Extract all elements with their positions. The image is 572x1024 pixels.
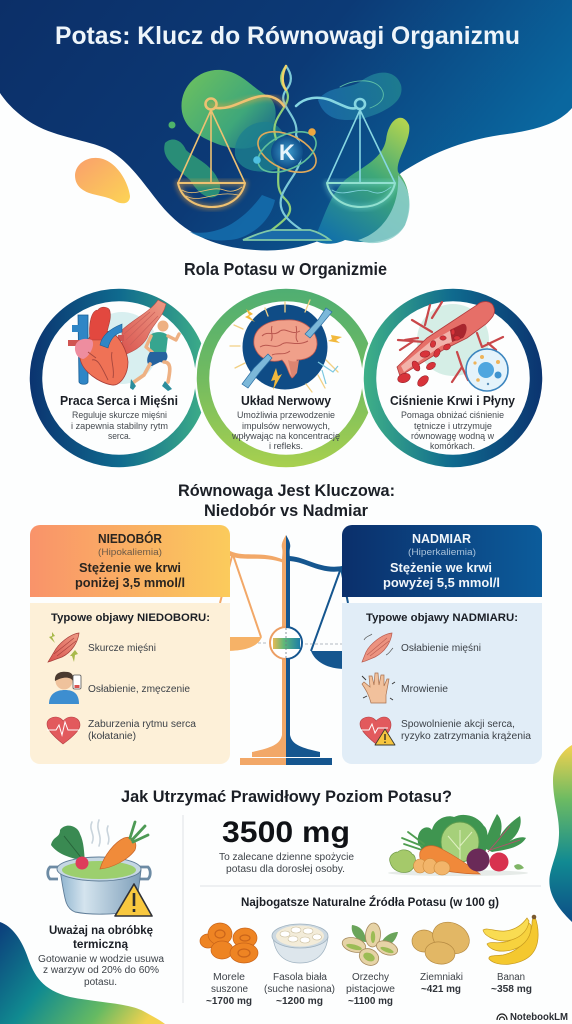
left scale beam and pan (178, 96, 284, 207)
carrot slices (414, 859, 426, 873)
label: Ciśnienie Krwi: Pomaga obniżać ciśnienie (401, 410, 504, 421)
panel: excess symptoms: Spowolnienie akcji serca, (401, 719, 515, 730)
beam (230, 551, 284, 563)
food: potatoes (412, 916, 475, 995)
text block: cooking warning: Uważaj na obróbkę (49, 923, 153, 937)
heading: Rola Potasu: Rola Potasu w Organizmie (184, 259, 387, 279)
icon: brain and nerve impulses (230, 300, 342, 392)
text block: cooking warning: Gotowanie w wodzie usuwa (38, 954, 164, 965)
food: dried apricots (200, 923, 258, 1007)
atom with K symbol: K (279, 140, 295, 165)
label: Praca Serca: Praca Serca i Mięśni (60, 394, 178, 408)
panel: excess header (342, 525, 542, 597)
atom with K symbol (252, 123, 322, 181)
food: white beans: ~1200 mg (276, 996, 323, 1007)
stat: daily intake (219, 816, 354, 875)
pulmonary artery (100, 324, 122, 348)
label: Praca Serca: serca. (108, 431, 131, 442)
gauge (270, 627, 302, 659)
atrium (75, 339, 93, 359)
title: Potas: Klucz do Równowagi Organizmu (55, 22, 520, 50)
food: potatoes: ~421 mg (421, 984, 461, 995)
panel: deficiency header: (Hipokaliemia) (98, 547, 162, 558)
panel: deficiency symptoms: Osłabienie, zmęczenie (88, 684, 190, 695)
icon: heart, muscle and runner (68, 300, 179, 391)
heading: Jak Utrzymać: Jak Utrzymać Prawidłowy Poziom Potasu? (121, 787, 452, 806)
food: white beans: (suche nasiona) (264, 984, 335, 995)
icon: weak muscle (362, 633, 393, 662)
heading: Równowaga: Równowaga Jest Kluczowa: (178, 482, 395, 500)
central balance scale (220, 535, 350, 765)
panel: excess symptoms: Typowe objawy NADMIARU: (366, 612, 518, 624)
pole (252, 535, 286, 757)
label: Ciśnienie Krwi: Ciśnienie Krwi i Płyny (390, 394, 515, 408)
leaves back (418, 815, 488, 860)
panel: excess header: (Hiperkaliemia) (408, 547, 476, 558)
beet leaves (51, 826, 85, 862)
steam (91, 820, 109, 846)
food: bananas (483, 915, 538, 995)
label: Ciśnienie Krwi: tętnicze i utrzymuje (414, 421, 492, 432)
food: dried apricots: Morele (213, 972, 245, 983)
panel: excess symptoms: ryzyko zatrzymania krążenia (401, 731, 531, 742)
panel: excess symptoms (342, 603, 542, 764)
red blood cells (396, 329, 460, 388)
heading: sources: Najbogatsze Naturalne Źródła Potasu (w 100 g) (241, 896, 499, 909)
food: potatoes: Ziemniaki (420, 972, 463, 983)
panel: deficiency header (30, 525, 230, 597)
panel: deficiency header: poniżej 3,5 mmol/l (75, 575, 185, 590)
logo: NotebookLM: NotebookLM (510, 1012, 568, 1023)
label: Układ Nerwowy: Układ Nerwowy (241, 394, 331, 408)
pot handles (48, 867, 150, 879)
text block: cooking warning (38, 923, 164, 988)
label: Ciśnienie Krwi: równowagę wodną w (411, 431, 494, 442)
label: Praca Serca (60, 394, 178, 442)
food: dried apricots: suszone (211, 984, 248, 995)
label: Ciśnienie Krwi (390, 394, 515, 452)
text block: cooking warning: z warzyw od 20% do 60% (43, 965, 159, 976)
food: bananas: ~358 mg (491, 984, 532, 995)
panel: deficiency header: NIEDOBÓR (98, 531, 162, 546)
carrot (420, 846, 480, 874)
decorative orange blob (75, 158, 130, 203)
heart (80, 331, 128, 385)
label: Praca Serca: i zapewnia stabilny rytm (71, 421, 168, 432)
heading: Równowaga (178, 482, 395, 520)
muscle (122, 300, 166, 356)
icon: tingling hand (362, 673, 395, 703)
scale pole (twisted) (243, 66, 330, 240)
warning triangle (115, 884, 152, 916)
header wave background (0, 0, 572, 250)
panel: deficiency symptoms (30, 603, 230, 764)
stat: daily intake: To zalecane dzienne spożycie (219, 852, 354, 863)
food: pistachios: Orzechy (352, 972, 389, 983)
dashed level (258, 643, 342, 644)
food: white beans: Fasola biała (273, 972, 327, 983)
food: white beans (264, 924, 335, 1007)
icon: tired person (49, 672, 81, 704)
label: Układ Nerwowy: Umożliwia przewodzenie (237, 410, 335, 421)
carrot (100, 837, 136, 869)
base (240, 758, 286, 765)
radish (76, 856, 88, 870)
vessel (78, 315, 88, 384)
stat: daily intake: potasu dla dorosłej osoby. (226, 864, 345, 875)
panel: deficiency symptoms: Typowe objawy NIEDOBORU: (51, 612, 210, 624)
text block: cooking warning: potasu. (84, 977, 117, 988)
food: pistachios (341, 922, 400, 1007)
panel: excess symptoms: Osłabienie mięśni (401, 643, 481, 654)
icon: cramping muscle (48, 632, 79, 662)
decorative bottom-left blob (0, 922, 165, 1024)
icon: blood vessel and cell (396, 302, 508, 391)
runner (158, 320, 168, 332)
vessel lumen (401, 324, 467, 372)
panel: excess symptoms: Mrowienie (401, 684, 448, 695)
strings and pans (220, 555, 261, 637)
text block: cooking warning: termiczną (73, 937, 128, 951)
beet and radish (466, 848, 490, 872)
right scale beam and pan (296, 81, 395, 207)
icon: vegetables (388, 814, 528, 876)
panel: deficiency symptoms: Zaburzenia rytmu serca (88, 719, 196, 730)
food: bananas: Banan (497, 972, 525, 983)
label: Układ Nerwowy: i refleks. (269, 441, 303, 452)
carrot tops (402, 832, 424, 850)
panel: excess header: NADMIAR (412, 532, 471, 546)
cell (466, 349, 508, 391)
panel: deficiency symptoms: (kołatanie) (88, 731, 136, 742)
icon: pot with vegetables and warning (48, 820, 152, 916)
panel: interlocking rings (36, 295, 536, 461)
label: Ciśnienie Krwi: komórkach. (430, 441, 475, 452)
heading: Równowaga: Niedobór vs Nadmiar (204, 502, 369, 520)
panel: deficiency symptoms: Skurcze mięśni (88, 643, 156, 654)
food: pistachios: pistacjowe (346, 984, 395, 995)
cabbage (441, 822, 479, 862)
aorta (89, 307, 110, 340)
stat: daily intake: 3500 mg (222, 816, 350, 849)
hero illustration: balance scale with potassium atom (164, 66, 410, 244)
label: Układ Nerwowy: impulsów nerwowych, (242, 421, 330, 432)
lightning bolts (245, 309, 342, 390)
label: Układ Nerwowy: wpływając na koncentrację (231, 431, 340, 442)
neurons (305, 308, 332, 338)
panel: excess header: powyżej 5,5 mmol/l (383, 575, 500, 590)
brain (254, 320, 317, 378)
food: dried apricots: ~1700 mg (206, 996, 252, 1007)
icon: heart with warning (360, 717, 395, 745)
pot body (60, 870, 141, 914)
panel: excess header: Stężenie we krwi (390, 560, 492, 575)
label: Praca Serca: Reguluje skurcze mięśni (72, 410, 167, 421)
vessel tube (397, 302, 495, 376)
divider (183, 815, 541, 1003)
label: Układ Nerwowy (231, 394, 340, 452)
icon: heart with pulse (47, 717, 80, 744)
branches (398, 302, 503, 382)
food: pistachios: ~1100 mg (348, 996, 393, 1007)
broccoli (390, 850, 415, 873)
decorative right blob (549, 745, 572, 922)
panel: deficiency header: Stężenie we krwi (79, 560, 181, 575)
hero background blobs (164, 70, 410, 244)
